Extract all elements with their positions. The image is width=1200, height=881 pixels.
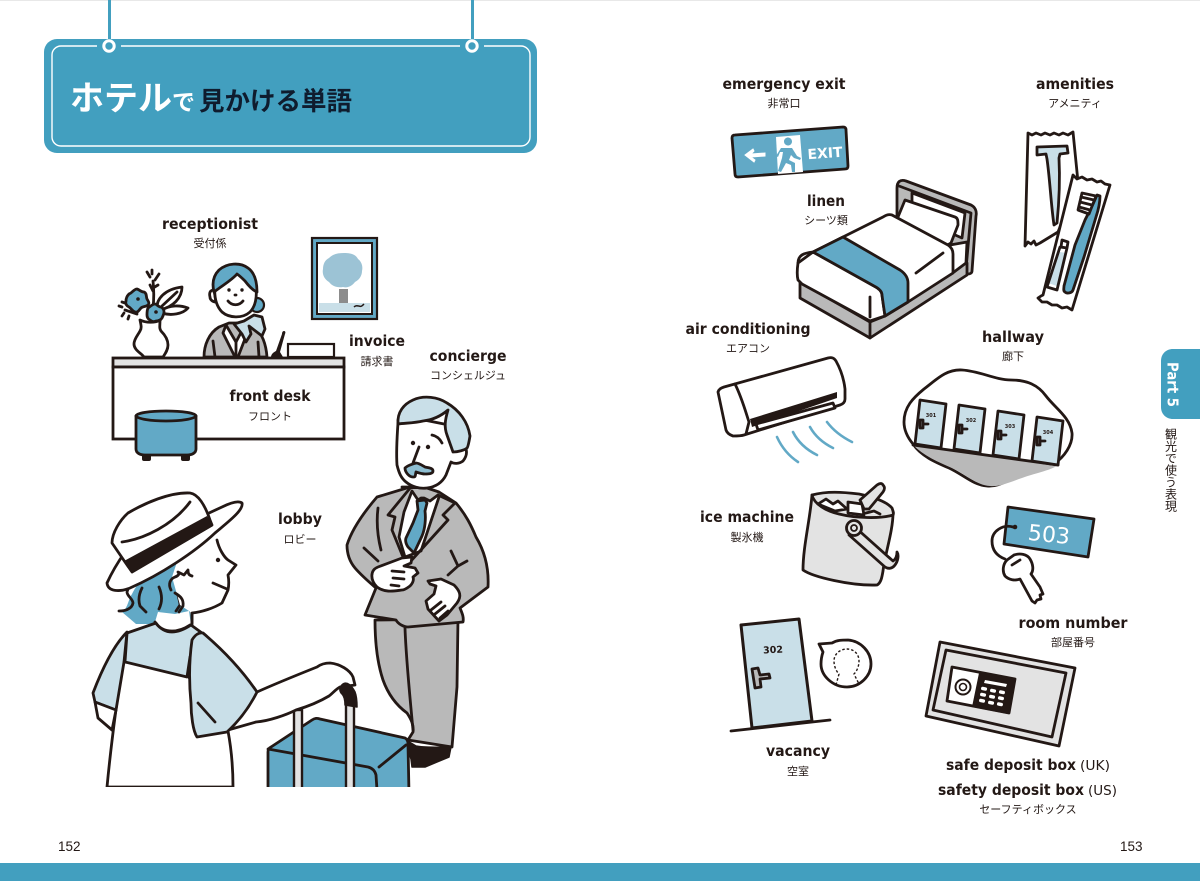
hair (122, 564, 190, 624)
label: emergency exit: emergency exit (722, 75, 846, 93)
label: invoice: invoice (349, 332, 405, 350)
icon: amenities (1025, 132, 1110, 310)
stool (136, 411, 196, 461)
label: concierge: コンシェルジュ (430, 370, 506, 382)
label: air conditioning: エアコン (726, 343, 770, 355)
icon: exit sign (732, 127, 848, 177)
front desk (113, 358, 344, 461)
yoke (125, 623, 202, 677)
icon: exit sign: EXIT (807, 145, 844, 163)
page number 152: 152 (58, 839, 81, 854)
icon: bed (797, 180, 976, 338)
woman arm (228, 663, 355, 730)
label: hallway: 廊下 (1002, 349, 1024, 363)
mattress right (950, 242, 967, 274)
trousers (375, 619, 458, 747)
title text: ホテルで見かける単語 (70, 80, 352, 118)
icon: safe box (926, 642, 1075, 746)
picture frame (312, 238, 377, 319)
icon: hallway: 302 (966, 418, 977, 424)
tab: Part 5: Part 5 (1164, 362, 1182, 407)
icon: air conditioner (718, 358, 852, 462)
label: vacancy: vacancy (766, 742, 830, 760)
icon: hallway: 304 (1043, 430, 1054, 436)
toothbrush pack (1038, 175, 1110, 310)
head (397, 419, 466, 488)
label: concierge (430, 347, 506, 382)
receptionist (204, 264, 267, 357)
label: front desk: フロント (248, 411, 292, 423)
label: lobby: lobby (278, 510, 322, 528)
label: invoice (349, 332, 405, 368)
label: air conditioning: air conditioning (686, 320, 810, 338)
duvet (798, 215, 953, 322)
icon: ice bucket (803, 484, 898, 585)
label: receptionist: 受付係 (194, 237, 226, 250)
bottom band (0, 863, 1200, 881)
left sleeve (93, 632, 127, 710)
label: hallway: hallway (982, 328, 1044, 346)
label: emergency exit: 非常口 (768, 97, 800, 110)
label: safe deposit box: セーフティボックス (979, 803, 1077, 816)
label: safe deposit box: safety deposit box (938, 781, 1084, 799)
label: receptionist (162, 215, 258, 250)
woman with hat (93, 493, 357, 787)
suitcase (266, 706, 410, 787)
label: vacancy: 空室 (787, 765, 809, 778)
jacket (347, 487, 488, 627)
label: linen (804, 192, 848, 227)
label: lobby (278, 510, 322, 546)
flower vase (119, 270, 188, 357)
pillow (898, 200, 958, 246)
tab: Part 5 (1161, 349, 1200, 419)
label: safe deposit box (938, 756, 1117, 816)
hands (372, 557, 418, 591)
label: emergency exit (722, 75, 846, 110)
label: air conditioning (686, 320, 810, 355)
label: receptionist: receptionist (162, 215, 258, 233)
label: lobby: ロビー (284, 533, 316, 546)
label: front desk (230, 387, 311, 423)
label: amenities: アメニティ (1048, 98, 1102, 110)
handle grip (340, 683, 357, 707)
right sleeve (190, 633, 257, 737)
razor pack (1025, 132, 1078, 246)
icon: room key with tag: 503 (1027, 521, 1071, 550)
hat crown (112, 493, 212, 572)
base (800, 263, 967, 338)
label: ice machine: ice machine (700, 508, 794, 526)
blue band (813, 237, 908, 316)
label: room number: room number (1018, 614, 1128, 632)
neck (156, 611, 190, 624)
label: hallway (982, 328, 1044, 363)
label: linen: linen (807, 192, 845, 210)
label: safe deposit box: (UK) (1080, 759, 1110, 774)
label: safe deposit box: (US) (1088, 784, 1117, 799)
title banner (44, 0, 537, 153)
label: safe deposit box: safe deposit box (946, 756, 1076, 774)
label: room number (1018, 614, 1128, 649)
icon: hallway: 301 (926, 413, 937, 419)
icon: speech bubble with empty silhouette (819, 640, 871, 687)
concierge (347, 397, 488, 767)
dress body (106, 676, 234, 787)
page number 153: 153 (1120, 839, 1143, 854)
label: invoice: 請求書 (360, 354, 394, 368)
tab caption: 観光で使う表現 (1164, 428, 1178, 512)
icon: room key with tag (992, 507, 1094, 603)
label: linen: シーツ類 (804, 214, 848, 227)
label: amenities: amenities (1036, 75, 1114, 93)
label: vacancy (766, 742, 830, 778)
label: amenities (1036, 75, 1114, 110)
label: concierge: concierge (430, 347, 506, 365)
headboard (897, 180, 976, 275)
face (172, 546, 208, 612)
icon: hallway: 303 (1005, 424, 1016, 430)
pen and invoice paper (271, 331, 334, 357)
label: front desk: front desk (230, 387, 311, 405)
hat brim (107, 502, 242, 591)
label: ice machine (700, 508, 794, 544)
label: room number: 部屋番号 (1051, 636, 1095, 649)
icon: door (731, 619, 830, 731)
label: ice machine: 製氷機 (730, 530, 764, 544)
icon: door: 302 (763, 644, 783, 657)
icon: hallway (904, 370, 1072, 486)
shoes (406, 740, 451, 767)
